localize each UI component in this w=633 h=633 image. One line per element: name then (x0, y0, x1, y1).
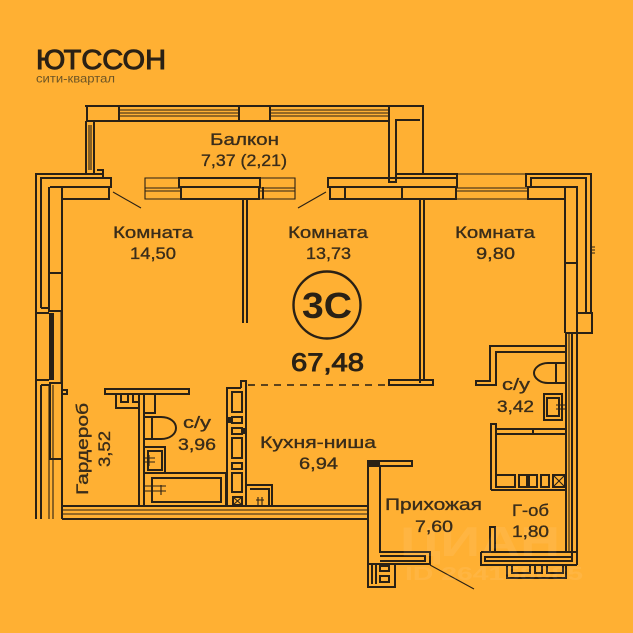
label: hallway: Прихожая (385, 495, 482, 514)
apartment type badge (294, 272, 360, 338)
label: room 2: Комната (288, 223, 369, 242)
label: room 1: Комната (113, 223, 194, 242)
label: room 2: 13,73 (306, 244, 351, 263)
right top wall (526, 174, 595, 333)
watermark: ЦИАН (400, 518, 560, 565)
label: room 3: 9,80 (476, 244, 515, 263)
right side riser wall (566, 333, 577, 565)
shaft (227, 381, 272, 506)
watermark: ID 264158085 (405, 564, 583, 584)
label: room 2 (288, 223, 369, 263)
label: storage (512, 501, 549, 541)
label: kitchen: Кухня-ниша (260, 433, 377, 452)
label: wardrobe (73, 403, 114, 495)
label: bathroom 2: с/у (502, 375, 531, 394)
right bathroom (476, 346, 566, 420)
label: balcony: Балкон (210, 130, 279, 149)
label: room 3 (455, 223, 536, 263)
room partition (243, 192, 326, 323)
label: wardrobe: Гардероб (73, 403, 92, 495)
hallway wall (368, 461, 474, 589)
label: bathroom 1: с/у (183, 413, 212, 432)
label: bathroom 2: 3,42 (497, 397, 534, 416)
label: room 1 (113, 223, 194, 263)
label: hallway (385, 495, 482, 536)
label: hallway: 7,60 (415, 517, 453, 536)
label: storage: Г-об (512, 501, 549, 520)
bottom wall (41, 383, 368, 519)
label: balcony (201, 130, 287, 170)
logo: ЮТССОН (36, 44, 166, 75)
label: kitchen: 6,94 (299, 454, 338, 473)
right wardrobe (491, 424, 566, 490)
label: bathroom 1 (178, 413, 216, 454)
dashed kitchen line (248, 384, 390, 386)
label: balcony: 7,37 (2,21) (201, 151, 287, 170)
top left room wall (36, 170, 141, 519)
watermark (400, 518, 583, 584)
apartment type badge: 3С (302, 285, 352, 326)
label: bathroom 1: 3,96 (178, 435, 216, 454)
left bathroom (105, 389, 226, 506)
floor plan walls (36, 106, 595, 589)
total area: 67,48 (291, 349, 364, 377)
balcony (85, 106, 423, 182)
label: room 3: Комната (455, 223, 536, 242)
label: room 1: 14,50 (130, 244, 176, 263)
bottom right wall (481, 527, 577, 578)
logo: сити-квартал (36, 72, 115, 86)
label: wardrobe: 3,52 (95, 431, 114, 467)
central window (145, 178, 295, 199)
label: storage: 1,80 (512, 522, 549, 541)
central wall block (328, 174, 527, 385)
label: kitchen (260, 433, 377, 473)
label: bathroom 2 (497, 375, 534, 416)
